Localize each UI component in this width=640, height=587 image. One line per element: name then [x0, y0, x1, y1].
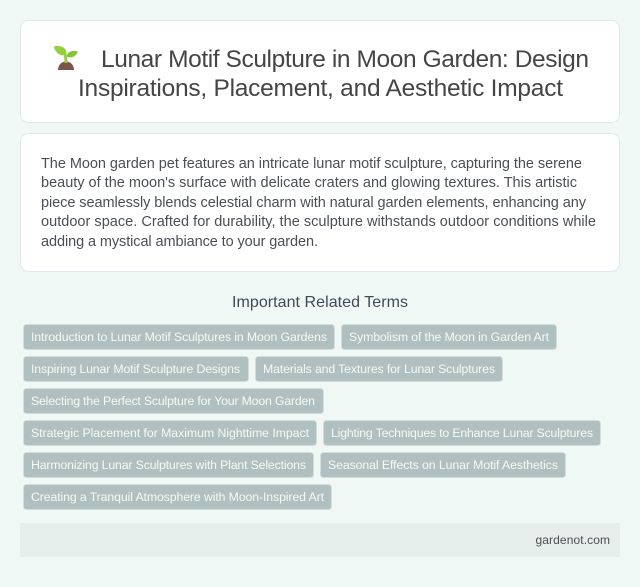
panel: related term chips — [24, 324, 600, 510]
chip: introduction — [24, 324, 334, 350]
heading: important related terms: Important Related Terms — [232, 294, 408, 311]
chip: lighting — [324, 420, 600, 446]
chip: harmonizing: Harmonizing Lunar Sculptures with Plant Selections — [31, 458, 306, 472]
text block: description: outdoor space. Crafted for durability, the sculpture withstands outdoor conditions while — [41, 214, 596, 230]
panel: description card — [20, 134, 620, 272]
chip: selecting — [24, 388, 324, 414]
chip: seasonal effects: Seasonal Effects on Lunar Motif Aesthetics — [328, 458, 558, 472]
icon: seedling — [54, 46, 78, 70]
chip: inspiring designs — [24, 356, 248, 382]
chip: inspiring designs: Inspiring Lunar Motif Sculpture Designs — [31, 362, 240, 376]
chip: harmonizing — [24, 452, 314, 478]
chip: introduction: Introduction to Lunar Motif Sculptures in Moon Gardens — [31, 330, 327, 344]
chip: symbolism: Symbolism of the Moon in Garden Art — [349, 330, 550, 344]
chip: materials: Materials and Textures for Lunar Sculptures — [263, 362, 495, 376]
chip: tranquil atmosphere: Creating a Tranquil Atmosphere with Moon-Inspired Art — [31, 490, 325, 504]
text block: description — [41, 156, 596, 250]
chip: lighting: Lighting Techniques to Enhance Lunar Sculptures — [331, 426, 593, 440]
text block: description: beauty of the moon's surface with delicate craters and glowing textures. This artistic — [41, 175, 577, 191]
text block: description: The Moon garden pet features an intricate lunar motif sculpture, capturing the serene — [41, 156, 582, 172]
chip: selecting: Selecting the Perfect Sculpture for Your Moon Garden — [31, 394, 315, 408]
title: Lunar Motif Sculpture in Moon Garden: Design — [101, 46, 589, 73]
title — [78, 46, 589, 102]
panel: title card — [20, 20, 620, 122]
chip: seasonal effects — [320, 452, 566, 478]
chip: symbolism — [342, 324, 556, 350]
chip: materials — [256, 356, 502, 382]
footer text: source: gardenot.com — [536, 533, 610, 547]
title: Inspirations, Placement, and Aesthetic Impact — [78, 75, 563, 102]
text block: description: adding a mystical ambiance to your garden. — [41, 234, 318, 250]
text block: description: piece seamlessly blends celestial charm with natural garden elements, enhancing any — [41, 195, 587, 211]
chip: strategic placement: Strategic Placement for Maximum Nighttime Impact — [31, 426, 310, 440]
chip: tranquil atmosphere — [24, 484, 332, 510]
chip: strategic placement — [24, 420, 316, 446]
footer bar — [20, 523, 620, 557]
